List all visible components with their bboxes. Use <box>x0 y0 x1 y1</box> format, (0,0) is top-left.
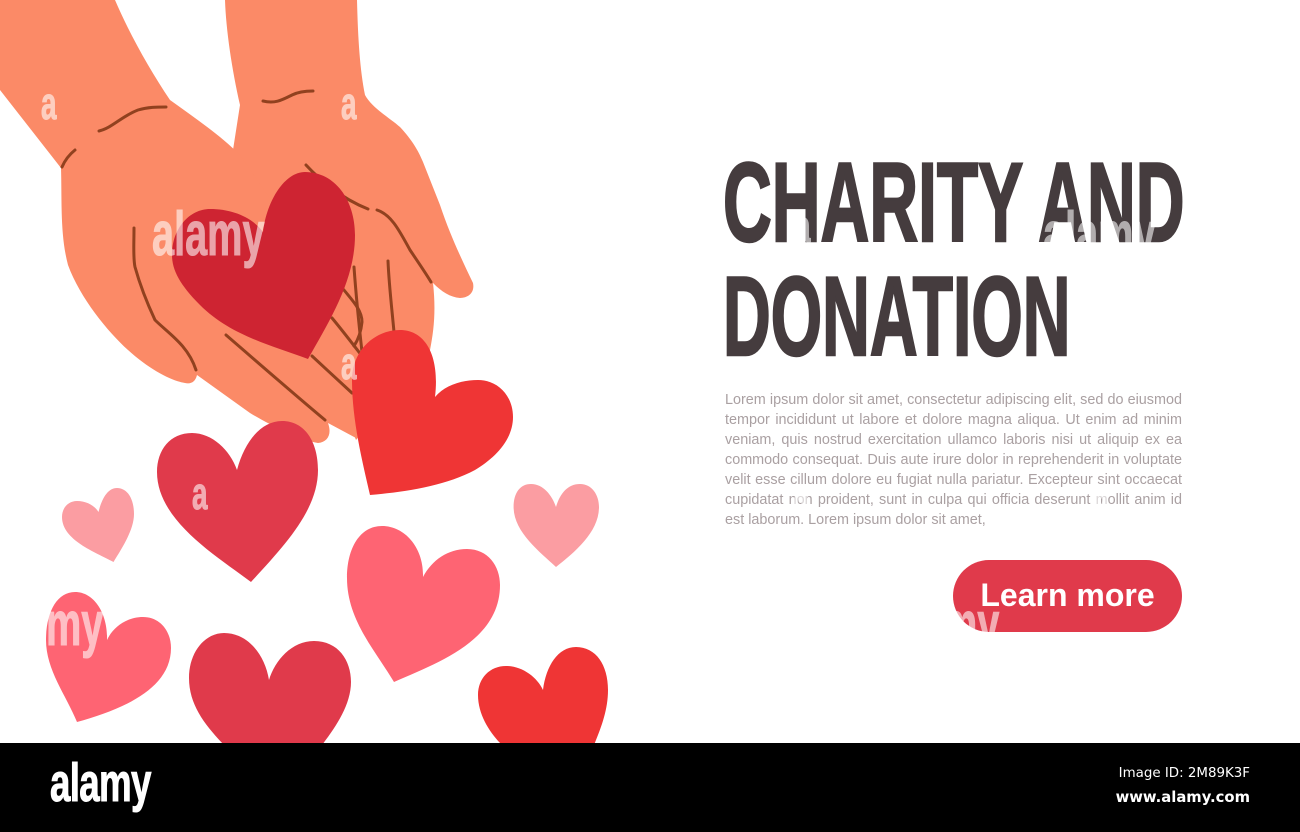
watermark: alamy overlays: a <box>341 78 357 129</box>
heart: pink centre <box>347 526 500 682</box>
heart: held in hands <box>172 172 355 359</box>
image id: Image ID: 2M89K3F <box>1119 766 1250 781</box>
body text: veniam, quis nostrud exercitation ullamco laboris nisi ut aliquip ex ea <box>725 432 1182 448</box>
title: CHARITY AND <box>723 140 1185 265</box>
watermark: alamy overlays: my <box>46 590 103 659</box>
watermark: alamy overlays: a <box>41 78 57 129</box>
title <box>723 140 1185 379</box>
heart: crimson bottom <box>189 633 351 745</box>
illustration: hands and hearts <box>0 0 608 743</box>
button: learn more: Learn more <box>980 577 1155 613</box>
watermark: alamy overlays: alamy <box>1043 200 1156 269</box>
heart: pale right <box>514 484 599 567</box>
heart: falling red <box>352 330 513 495</box>
footer bar <box>0 743 1300 832</box>
footer logo: alamy <box>50 753 151 813</box>
watermark: alamy overlays: a <box>192 468 208 519</box>
front hand <box>0 0 362 443</box>
body text: est laborum. Lorem ipsum dolor sit amet, <box>725 512 986 528</box>
button: learn more <box>953 560 1182 632</box>
heart: red bottom <box>478 647 608 745</box>
body text: cupidatat non proident, sunt in culpa qui officia deserunt mollit anim id <box>725 492 1182 508</box>
website: www.alamy.com <box>1116 789 1250 806</box>
body text: tempor incididunt ut labore et dolore magna aliqua. Ut enim ad minim <box>725 412 1182 428</box>
watermark: alamy overlays: a <box>795 201 811 252</box>
heart: crimson <box>157 421 318 582</box>
watermark: alamy overlays: my <box>942 590 999 659</box>
title: DONATION <box>723 254 1071 379</box>
body text: velit esse cillum dolore eu fugiat nulla pariatur. Excepteur sint occaecat <box>725 472 1182 488</box>
heart: pink left <box>46 592 171 722</box>
watermark: alamy overlays: a <box>793 468 809 519</box>
back hand <box>225 0 473 440</box>
body text <box>725 392 1182 528</box>
watermark: alamy overlays <box>41 78 1156 659</box>
watermark: alamy overlays: a <box>1093 468 1109 519</box>
heart: pale left <box>62 488 134 562</box>
body text: Lorem ipsum dolor sit amet, consectetur adipiscing elit, sed do eiusmod <box>725 392 1182 408</box>
watermark: alamy overlays: alamy <box>152 200 265 269</box>
body text: commodo consequat. Duis aute irure dolor in reprehenderit in voluptate <box>725 452 1182 468</box>
watermark: alamy overlays: a <box>341 338 357 389</box>
